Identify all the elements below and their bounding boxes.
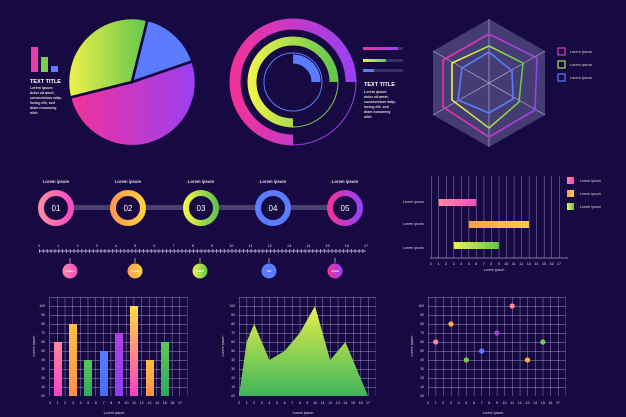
panel: scatter chart: 13 — [526, 401, 530, 405]
legend bars — [363, 47, 403, 72]
panel: area chart: 0 — [238, 401, 240, 405]
panel: timeline steps: Lorem ipsum — [188, 179, 214, 184]
panel: ruler with markers — [38, 244, 368, 278]
panel: scatter chart: 20 — [420, 376, 424, 380]
text block: left description: diam nonummy — [30, 106, 57, 110]
panel: area chart: 90 — [231, 313, 235, 317]
step 01 — [41, 193, 71, 223]
panel: area chart: 7 — [291, 401, 293, 405]
step 02: 02 — [124, 204, 133, 213]
panel: gantt chart: 15 — [542, 262, 546, 266]
panel: gantt chart: 3 — [453, 262, 455, 266]
step 02 — [113, 193, 143, 223]
panel: scatter chart: 80 — [420, 322, 424, 326]
panel: scatter chart: 60 — [420, 340, 424, 344]
panel: bar chart: Lorem ipsum — [104, 411, 124, 415]
panel: area chart: 20 — [231, 376, 235, 380]
panel: area chart: 00 — [231, 394, 235, 398]
panel: ruler with markers: 14 — [306, 244, 310, 248]
panel: gantt chart: 16 — [550, 262, 554, 266]
panel: gantt chart: Lorem ipsum — [403, 200, 424, 204]
panel: ruler with markers: 9 — [211, 244, 213, 248]
panel: scatter chart: 50 — [420, 349, 424, 353]
step 05: 05 — [341, 204, 350, 213]
panel: bar chart: 00 — [41, 394, 45, 398]
icon: mini bar chart — [31, 47, 58, 72]
radial rings — [235, 24, 356, 145]
panel: bar chart: 17 — [178, 401, 182, 405]
step 04 — [258, 193, 288, 223]
panel: gantt chart: Lorem ipsum — [403, 222, 424, 226]
panel: gantt chart: 6 — [475, 262, 477, 266]
panel: scatter chart: 10 — [502, 401, 506, 405]
panel: area chart: 50 — [231, 349, 235, 353]
panel: gantt chart: 2 — [445, 262, 447, 266]
panel: area chart: 13 — [336, 401, 340, 405]
panel: timeline steps: Lorem ipsum — [43, 179, 69, 184]
gantt bars — [438, 199, 529, 249]
step 04: 04 — [269, 204, 278, 213]
text block: right description: nibh — [364, 115, 372, 119]
panel: area chart: 5 — [276, 401, 278, 405]
panel: bar chart: 30 — [41, 367, 45, 371]
step 01: 01 — [52, 204, 61, 213]
gantt legend: Lorem ipsum — [580, 192, 601, 196]
panel: bar chart: 5 — [87, 401, 89, 405]
panel: ruler with markers: 0 — [38, 244, 40, 248]
panel: ruler with markers: 12 — [268, 244, 272, 248]
panel: gantt chart: 4 — [460, 262, 462, 266]
panel: bar chart: 10 — [124, 401, 128, 405]
panel: scatter chart: 17 — [556, 401, 560, 405]
panel: area chart: Lorem ipsum — [293, 411, 313, 415]
panel: area chart: 3 — [261, 401, 263, 405]
heading: text title right: TEXT TITLE — [364, 82, 395, 88]
panel: gantt chart: 14 — [534, 262, 538, 266]
panel: gantt chart: Lorem ipsum — [403, 246, 424, 250]
panel: scatter chart: 8 — [488, 401, 490, 405]
panel: scatter chart: 00 — [420, 394, 424, 398]
panel: gantt chart: Lorem ipsum — [484, 268, 504, 272]
ruler markers — [70, 258, 335, 263]
text block: left description: nibh — [30, 111, 38, 115]
panel: scatter chart: 14 — [533, 401, 537, 405]
panel: scatter chart: 1 — [435, 401, 437, 405]
panel: scatter chart: 11 — [510, 401, 514, 405]
panel: area chart: 6 — [284, 401, 286, 405]
panel: bar chart: 12 — [140, 401, 144, 405]
panel: bar chart: 7 — [103, 401, 105, 405]
panel: ruler with markers: 2 — [76, 244, 79, 248]
panel: bar chart: 16 — [170, 401, 174, 405]
panel: timeline steps: Lorem ipsum — [260, 179, 286, 184]
panel: scatter chart: 0 — [427, 401, 429, 405]
panel: bar chart: 1 — [57, 401, 59, 405]
panel: area chart: 100 — [229, 304, 235, 308]
panel: scatter chart: 2 — [442, 401, 444, 405]
panel: area chart: 17 — [366, 401, 370, 405]
panel: timeline steps: Lorem ipsum — [332, 179, 358, 184]
panel: pie chart with text — [30, 18, 196, 146]
pie chart — [68, 18, 196, 146]
panel: scatter chart: 9 — [496, 401, 498, 405]
panel: ruler with markers: 17 — [364, 244, 368, 248]
panel: bar chart: 100 — [39, 304, 45, 308]
text block: right description: consectetuer adip- — [364, 100, 397, 104]
panel: ruler with markers: 10 — [229, 244, 234, 248]
panel: scatter chart: 5 — [465, 401, 467, 405]
panel: gantt chart: 10 — [504, 262, 508, 266]
gantt legend: Lorem ipsum — [580, 205, 601, 209]
panel: ruler with markers: 15 — [325, 244, 330, 248]
panel: scatter chart: 30 — [420, 367, 424, 371]
panel: bar chart: 20 — [41, 376, 45, 380]
panel: area chart: 9 — [306, 401, 308, 405]
panel: gantt chart — [403, 176, 601, 272]
gantt legend — [567, 177, 601, 210]
panel: scatter chart: 6 — [473, 401, 475, 405]
panel: scatter chart: 10 — [420, 385, 424, 389]
panel: gantt chart: 17 — [557, 262, 561, 266]
panel: bar chart: 40 — [41, 358, 45, 362]
panel: bar chart: 11 — [132, 401, 136, 405]
panel: area chart: 4 — [268, 401, 270, 405]
text block: right description: dolor sit amet, — [364, 95, 389, 99]
radar legend: Lorem ipsum — [570, 50, 592, 54]
panel: bar chart — [32, 297, 188, 415]
panel: area chart: 1 — [246, 401, 248, 405]
text block: right description: diam nonummy — [364, 110, 391, 114]
radar legend — [558, 48, 592, 81]
panel: gantt chart: 13 — [527, 262, 531, 266]
panel: gantt chart: 5 — [468, 262, 470, 266]
text block: left description: consectetuer adip- — [30, 96, 63, 100]
panel: area chart — [221, 297, 376, 415]
panel: area chart: 16 — [359, 401, 363, 405]
panel: scatter chart: 7 — [481, 401, 483, 405]
panel: ruler with markers: 6 — [153, 244, 155, 248]
radar series — [443, 34, 537, 137]
text block: left description: Lorem ipsum — [30, 86, 53, 90]
gantt legend: Lorem ipsum — [580, 179, 601, 183]
panel: scatter chart: Lorem ipsum — [483, 411, 503, 415]
panel: area chart: 10 — [231, 385, 235, 389]
panel: bar chart: 15 — [163, 401, 167, 405]
panel: ruler with markers: 5 — [134, 244, 136, 248]
panel: scatter chart: 70 — [420, 331, 424, 335]
panel: ruler with markers: 11 — [249, 244, 253, 248]
text block: right description: iscing elit, sed — [364, 105, 389, 109]
panel: bar chart: 9 — [118, 401, 120, 405]
panel: radar chart — [433, 19, 592, 147]
panel: scatter chart: 90 — [420, 313, 424, 317]
panel: gantt chart: 7 — [483, 262, 485, 266]
heading: text title left: TEXT TITLE — [30, 79, 61, 85]
panel: bar chart: 14 — [155, 401, 159, 405]
radar legend: Lorem ipsum — [570, 63, 592, 67]
panel: area chart: 80 — [231, 322, 235, 326]
panel: ruler with markers: 16 — [345, 244, 349, 248]
panel: gantt chart: 1 — [438, 262, 440, 266]
step 03: 03 — [197, 204, 206, 213]
panel: area chart: 8 — [299, 401, 301, 405]
panel: bar chart: 10 — [41, 385, 45, 389]
panel: bar chart: 6 — [95, 401, 97, 405]
panel: bar chart: 13 — [148, 401, 152, 405]
panel: ruler with markers: Amet — [331, 269, 339, 273]
radar background — [433, 19, 545, 147]
panel: bar chart: 3 — [72, 401, 74, 405]
step 05 — [330, 193, 360, 223]
panel: area chart: 40 — [231, 358, 235, 362]
panel: ruler with markers: 4 — [115, 244, 117, 248]
panel: bar chart: 2 — [64, 401, 66, 405]
panel: scatter chart: 4 — [458, 401, 460, 405]
panel: area chart: 11 — [321, 401, 324, 405]
panel: gantt chart: 9 — [498, 262, 500, 266]
panel: scatter chart: 40 — [420, 358, 424, 362]
panel: scatter chart: 15 — [541, 401, 545, 405]
panel: gantt chart: 8 — [490, 262, 492, 266]
panel: bar chart: 50 — [41, 349, 45, 353]
panel: ruler with markers: 3 — [96, 244, 98, 248]
panel: area chart: 12 — [328, 401, 332, 405]
panel: scatter chart: 12 — [518, 401, 522, 405]
panel: bar chart: 4 — [80, 401, 82, 405]
radar legend: Lorem ipsum — [570, 76, 592, 80]
panel: area chart: 60 — [231, 340, 235, 344]
panel: timeline steps: Lorem ipsum — [115, 179, 141, 184]
panel: bar chart: 8 — [110, 401, 112, 405]
panel: area chart: 14 — [343, 401, 347, 405]
panel: ruler with markers: 13 — [287, 244, 291, 248]
panel: ruler with markers: 8 — [192, 244, 194, 248]
panel: area chart: 30 — [231, 367, 235, 371]
step 03 — [186, 193, 216, 223]
panel: ruler with markers: 7 — [173, 244, 175, 248]
panel: radial progress chart — [235, 24, 403, 145]
panel: scatter chart: 16 — [548, 401, 552, 405]
panel: gantt chart: 12 — [519, 262, 523, 266]
panel: area chart: Lorem ipsum — [221, 336, 225, 356]
panel: ruler with markers: 1 — [57, 244, 59, 248]
text block: right description: Lorem ipsum — [364, 90, 387, 94]
panel: gantt chart: 0 — [430, 262, 432, 266]
panel: bar chart: 0 — [49, 401, 51, 405]
text block: left description: dolor sit amet, — [30, 91, 55, 95]
panel: timeline steps — [41, 179, 360, 223]
panel: bar chart: 90 — [41, 313, 45, 317]
panel: bar chart: Lorem ipsum — [32, 336, 36, 356]
panel: bar chart: 70 — [41, 331, 45, 335]
panel: scatter chart: 3 — [450, 401, 452, 405]
panel: scatter chart: Lorem ipsum — [410, 336, 414, 356]
panel: area chart: 15 — [351, 401, 355, 405]
panel: area chart: 70 — [231, 331, 235, 335]
panel: bar chart: 80 — [41, 322, 45, 326]
panel: ruler with markers: Ipsum — [131, 269, 140, 273]
panel: area chart: 2 — [253, 401, 255, 405]
panel: scatter chart — [410, 297, 566, 415]
panel: area chart: 10 — [313, 401, 317, 405]
panel: ruler with markers: Dolor — [196, 269, 205, 273]
panel: ruler with markers: Lorem — [65, 269, 75, 273]
panel: scatter chart: 100 — [418, 304, 424, 308]
panel: ruler with markers: Sit — [267, 269, 271, 273]
text block: left description: iscing elit, sed — [30, 101, 55, 105]
panel: bar chart: 60 — [41, 340, 45, 344]
panel: gantt chart: 11 — [512, 262, 516, 266]
